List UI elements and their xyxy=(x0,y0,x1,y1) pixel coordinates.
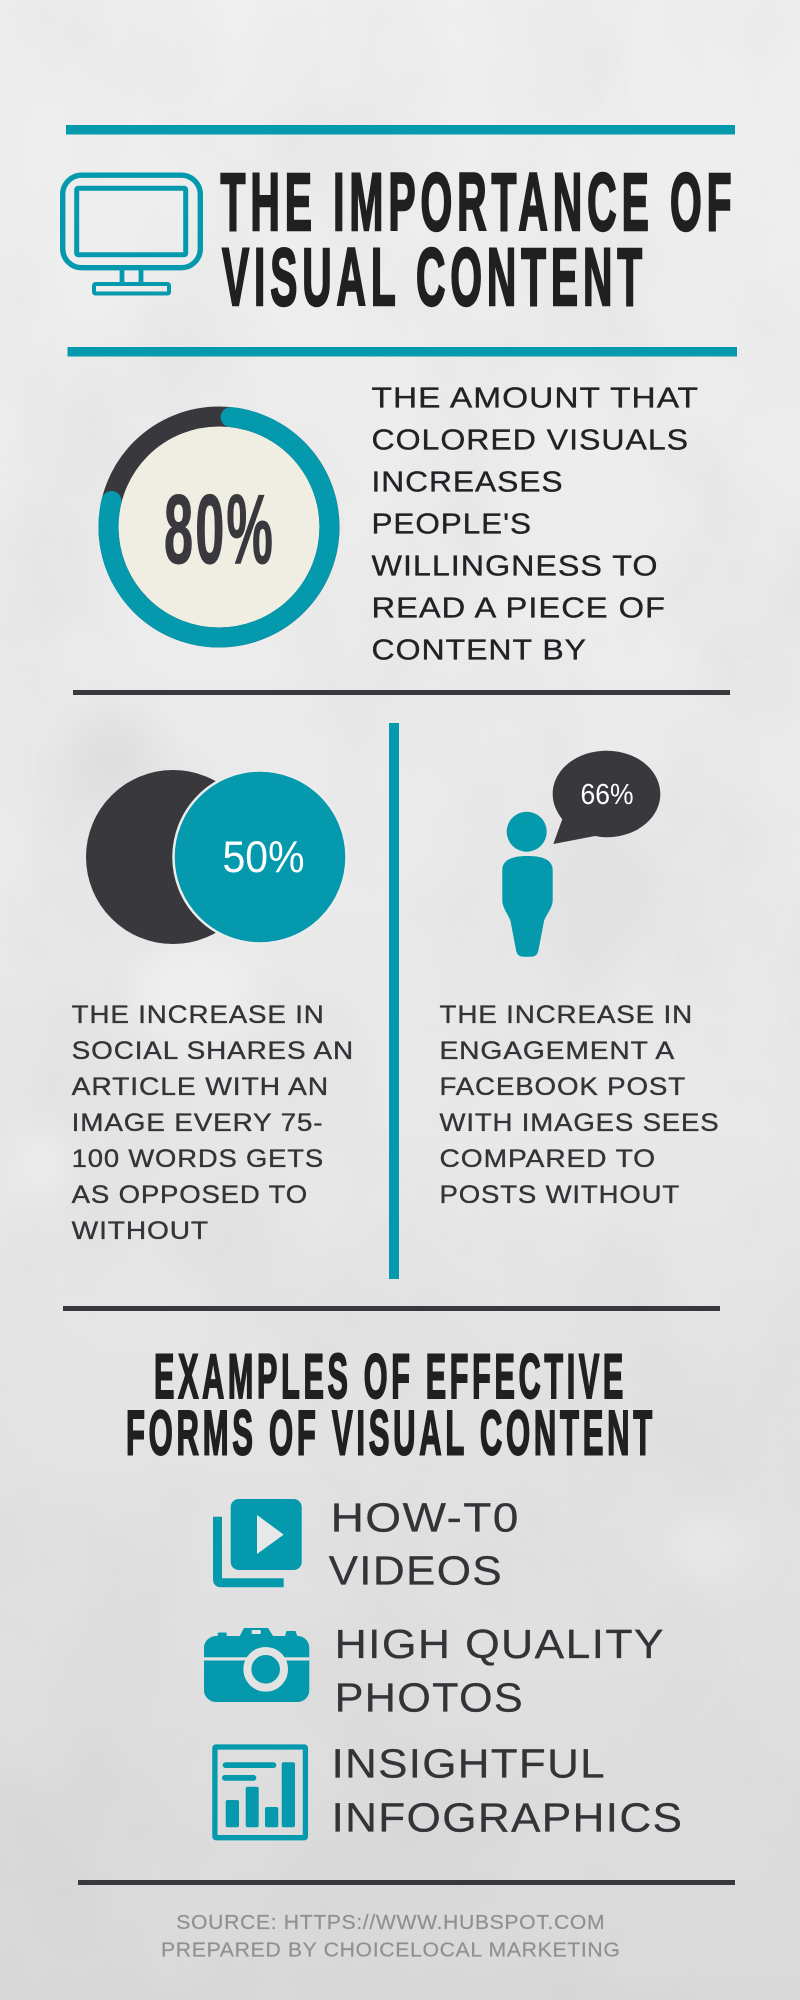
stat description: COLORED VISUALS xyxy=(372,424,689,456)
stat description: READ A PIECE OF xyxy=(372,592,666,624)
stat description: PEOPLE'S xyxy=(372,508,532,540)
stat description: THE AMOUNT THAT xyxy=(372,382,699,414)
50 percent description: 100 WORDS GETS xyxy=(72,1145,324,1173)
label: high quality photos xyxy=(335,1621,665,1720)
stat description: INCREASES xyxy=(372,466,564,498)
list item: photos xyxy=(204,1621,665,1720)
donut chart: 80%: 80% xyxy=(164,474,275,584)
source credits: PREPARED BY CHOICELOCAL MARKETING xyxy=(161,1940,620,1962)
label: insightful infographics: INSIGHTFUL xyxy=(332,1740,606,1786)
label: high quality photos: PHOTOS xyxy=(335,1674,524,1720)
icon: camera xyxy=(204,1628,309,1702)
label: how-to videos: HOW-T0 xyxy=(331,1494,520,1540)
icon: computer monitor xyxy=(63,175,200,294)
panel: 66 percent stat xyxy=(440,751,720,1209)
50 percent description: SOCIAL SHARES AN xyxy=(72,1037,354,1065)
label: high quality photos: HIGH QUALITY xyxy=(335,1621,665,1667)
50 percent description: ARTICLE WITH AN xyxy=(72,1073,329,1101)
50 percent description: IMAGE EVERY 75- xyxy=(72,1109,323,1137)
dark rule xyxy=(73,690,730,695)
second teal rule xyxy=(68,347,737,356)
66 percent description: COMPARED TO xyxy=(440,1145,656,1173)
icon: video stack xyxy=(213,1499,302,1587)
50 percent description: WITHOUT xyxy=(72,1217,209,1245)
list item: infographics xyxy=(215,1740,683,1840)
icon: infographic chart xyxy=(215,1747,305,1838)
label: how-to videos xyxy=(329,1494,520,1594)
66 percent description: ENGAGEMENT A xyxy=(440,1037,675,1065)
donut chart: 80% xyxy=(108,416,330,638)
section heading xyxy=(126,1342,656,1468)
bottom rule xyxy=(78,1880,735,1885)
vertical divider xyxy=(389,723,399,1279)
venn diagram: 50% xyxy=(86,770,346,944)
icon: person with speech bubble xyxy=(502,751,660,957)
icon: person with speech bubble: 66% xyxy=(580,779,634,811)
label: insightful infographics: INFOGRAPHICS xyxy=(332,1794,683,1840)
top rule xyxy=(66,125,735,134)
panel: 50 percent stat xyxy=(72,770,354,1245)
66 percent description xyxy=(440,1001,720,1209)
50 percent description: THE INCREASE IN xyxy=(72,1001,325,1029)
50 percent description xyxy=(72,1001,354,1245)
stat description xyxy=(372,382,699,666)
label: how-to videos: VIDEOS xyxy=(329,1548,503,1594)
stat description: WILLINGNESS TO xyxy=(372,550,658,582)
66 percent description: WITH IMAGES SEES xyxy=(440,1109,720,1137)
venn diagram: 50%: 50% xyxy=(222,833,304,882)
50 percent description: AS OPPOSED TO xyxy=(72,1181,308,1209)
66 percent description: THE INCREASE IN xyxy=(440,1001,693,1029)
stat description: CONTENT BY xyxy=(372,634,587,666)
source credits: SOURCE: HTTPS://WWW.HUBSPOT.COM xyxy=(176,1912,605,1934)
dark rule below stats xyxy=(63,1306,720,1311)
66 percent description: POSTS WITHOUT xyxy=(440,1181,680,1209)
panel: 80 percent stat xyxy=(108,382,699,666)
source credits xyxy=(161,1912,620,1962)
title xyxy=(220,157,736,323)
66 percent description: FACEBOOK POST xyxy=(440,1073,686,1101)
list item: videos xyxy=(213,1494,520,1594)
label: insightful infographics xyxy=(332,1740,683,1840)
